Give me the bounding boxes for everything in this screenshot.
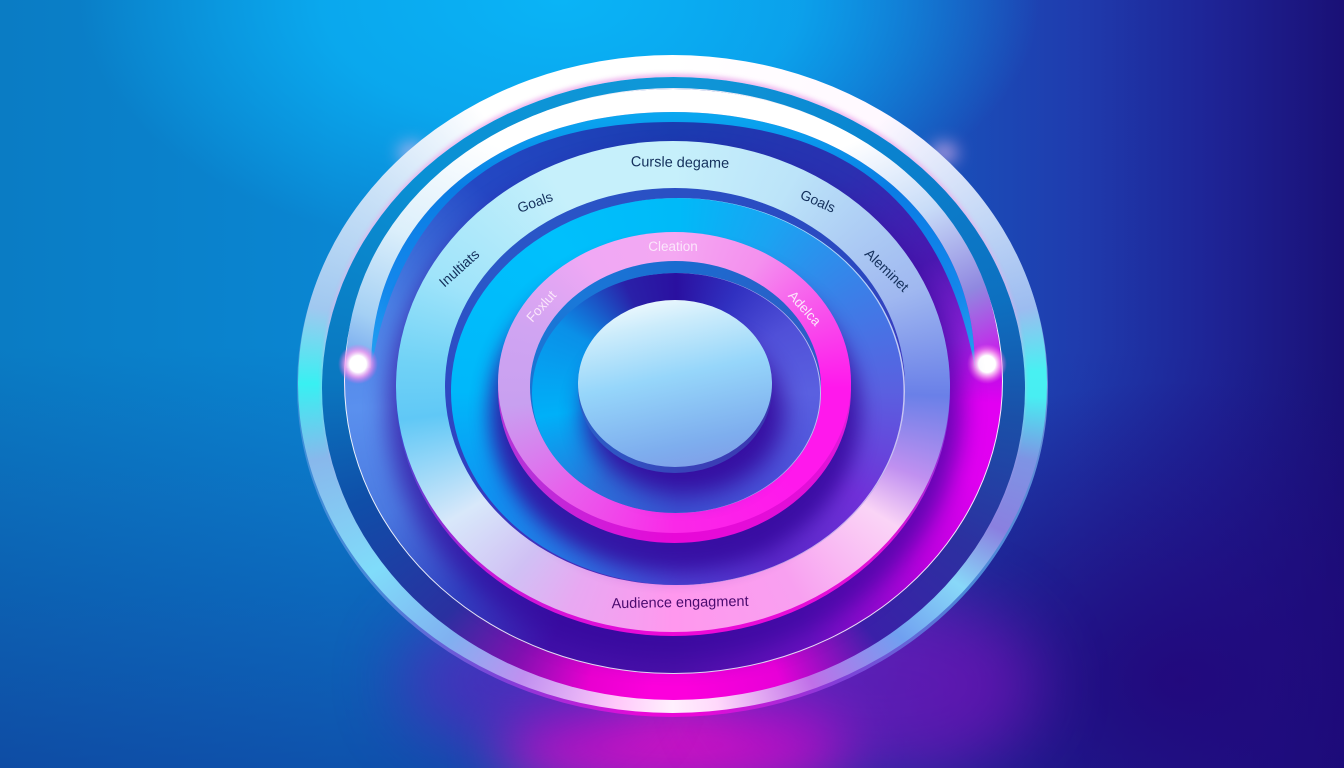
purple glow at lower left [400,610,640,750]
label: Cleation: Cleation [648,239,698,254]
ring: second blue band [322,77,1025,700]
label: Inultiats: Inultiats [436,246,482,290]
label: Adelca: Adelca [785,288,824,329]
well: pink ring wall [530,261,821,513]
ring: outer glass band [298,55,1047,713]
well: inner recess floor [451,198,905,585]
ring: pink band [498,232,851,533]
label: Foxlut: Foxlut [523,287,559,325]
label: Aleminet: Aleminet [862,245,912,295]
label: Goals left: Goals [515,188,555,216]
central disc [578,300,772,467]
well: pink ring floor [532,273,821,513]
highlight at upper right of the ring [930,142,958,164]
label: Audience engagment: Audience engagment [611,594,749,612]
well: inner recess wall [445,188,905,585]
central disc cast shadow [584,330,784,495]
ring: label band lower lip [396,146,950,636]
ring: pink band lower lip [498,236,851,543]
label: Goals right: Goals [798,186,838,216]
highlight at upper left of the ring [398,142,426,164]
purple glow at lower right [720,590,1040,768]
central disc lower lip [578,304,772,473]
pink glow below the outer ring [500,690,850,768]
ring: outer band lower lip [297,57,1048,717]
ring: labelled light band [396,141,950,632]
ring: inner body with thin white outline [344,88,1003,674]
label: Cursle degame: Cursle degame [631,154,729,172]
shadow under the label ring [388,155,962,660]
shadow under the pink ring [490,252,860,572]
